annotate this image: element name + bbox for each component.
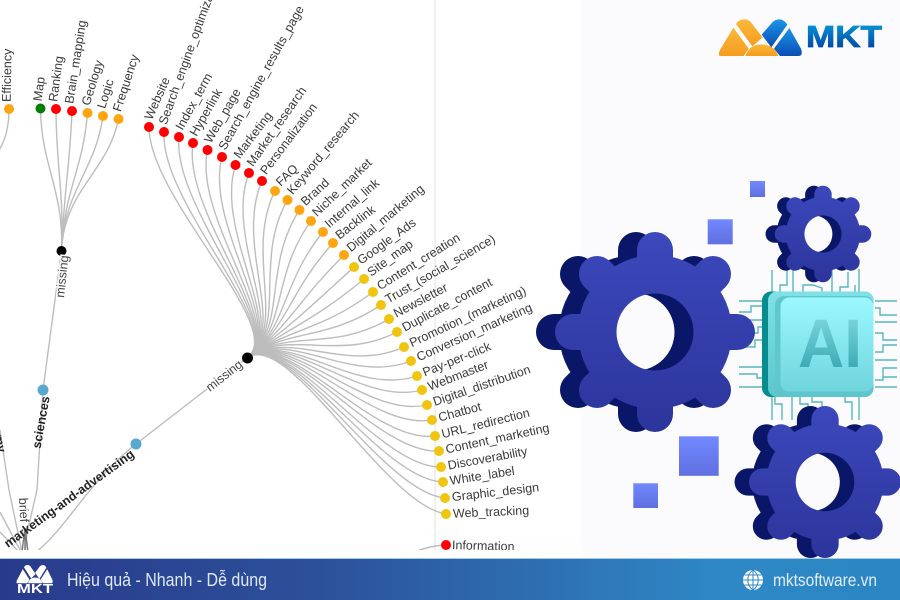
node: Digital_marketing: Digital_marketing	[344, 182, 427, 255]
node: URL_redirection: URL_redirection	[440, 406, 531, 441]
node: Logic: Logic	[95, 78, 117, 110]
footer logo: MKT	[17, 581, 53, 596]
node: Webmaster: Webmaster	[426, 358, 490, 394]
node: Site_map: Site_map	[365, 237, 416, 279]
node: Web_page: Web_page	[201, 86, 244, 145]
node: Niche_market: Niche_market	[309, 155, 375, 219]
node: Hyperlink: Hyperlink	[187, 86, 226, 138]
node: Graphic_design: Graphic_design	[451, 480, 540, 504]
chip circuit traces	[739, 269, 897, 420]
footer slogan: Hiệu quả - Nhanh - Dễ dùng	[67, 569, 267, 590]
decorative squares	[633, 181, 765, 508]
right panel background	[581, 0, 900, 558]
node: Index_term: Index_term	[173, 71, 215, 132]
AI chip: AI	[798, 305, 862, 382]
node: Web_tracking	[441, 506, 528, 520]
node: White_label: White_label	[449, 464, 516, 488]
illustration: AI chip with gears	[554, 181, 897, 544]
node: Marketing: Marketing	[231, 109, 275, 161]
node: Information: Information	[452, 538, 515, 554]
icon: small gear top	[774, 194, 863, 274]
hub: main missing: missing	[203, 357, 245, 394]
node: Map	[33, 78, 47, 114]
AI chip	[762, 292, 874, 397]
node: Frequency: Frequency	[110, 52, 142, 113]
node: Trust_(social_science): Trust_(social_science)	[383, 232, 498, 306]
hub: upper missing: missing	[53, 255, 71, 298]
node: Geology: Geology	[79, 58, 106, 107]
label: brief: brief	[16, 497, 31, 523]
node: Website	[144, 78, 170, 132]
node: Search_engine_results_page: Search_engine_results_page	[216, 3, 307, 152]
node: Discoverability: Discoverability	[447, 444, 529, 473]
node: FAQ	[270, 165, 299, 196]
node: Market_research: Market_research	[244, 84, 309, 169]
footer logo	[16, 565, 53, 596]
vertical divider	[434, 0, 436, 550]
node: Content_marketing: Content_marketing	[444, 421, 551, 456]
node: Brain_mapping: Brain_mapping	[62, 19, 89, 105]
icon: medium gear bottom	[748, 420, 887, 544]
node: Digital_distribution: Digital_distribution	[431, 362, 532, 409]
node: Internal_link: Internal_link	[322, 176, 383, 231]
node: Personalization: Personalization	[257, 100, 320, 177]
node: Information	[441, 540, 514, 550]
node: Web_tracking: Web_tracking	[453, 503, 529, 521]
node: Content_creation: Content_creation	[374, 231, 463, 293]
footer bar	[0, 558, 900, 600]
node: Brand	[294, 178, 330, 215]
nodes and labels: main hub leaves	[0, 0, 551, 554]
logo: MKT top right: MKT	[806, 19, 882, 54]
category node: sciences: sciences	[30, 395, 53, 450]
node: Keyword_research: Keyword_research	[284, 108, 362, 197]
node: Brand: Brand	[298, 175, 332, 209]
node: Website: Website	[142, 75, 173, 122]
node: Pay-per-click: Pay-per-click	[421, 339, 494, 379]
links: main missing hub to leaves	[0, 108, 446, 552]
node: Map: Map	[31, 76, 48, 102]
node: Chatbot: Chatbot	[437, 399, 483, 424]
icon: globe	[743, 570, 763, 590]
icon: large gear	[554, 250, 737, 414]
node: FAQ: FAQ	[273, 161, 301, 189]
node: Site_map	[359, 242, 412, 284]
node: Duplicate_content: Duplicate_content	[400, 275, 495, 334]
logo: MKT top right	[719, 19, 882, 56]
node: Conversion_marketing: Conversion_marketing	[414, 300, 534, 364]
node: Promotion_(marketing): Promotion_(marketing)	[407, 284, 528, 350]
node: Backlink: Backlink	[333, 202, 379, 242]
node: Efficiency: Efficiency	[0, 48, 15, 102]
footer website: mktsoftware.vn	[773, 570, 877, 590]
node: Google_Ads: Google_Ads	[355, 216, 419, 267]
tree graph	[0, 0, 551, 554]
node: Newsletter: Newsletter	[391, 280, 450, 321]
category node: marketing-and-advertising: marketing-and-advertising	[2, 447, 137, 550]
node: Ranking: Ranking	[46, 55, 66, 102]
